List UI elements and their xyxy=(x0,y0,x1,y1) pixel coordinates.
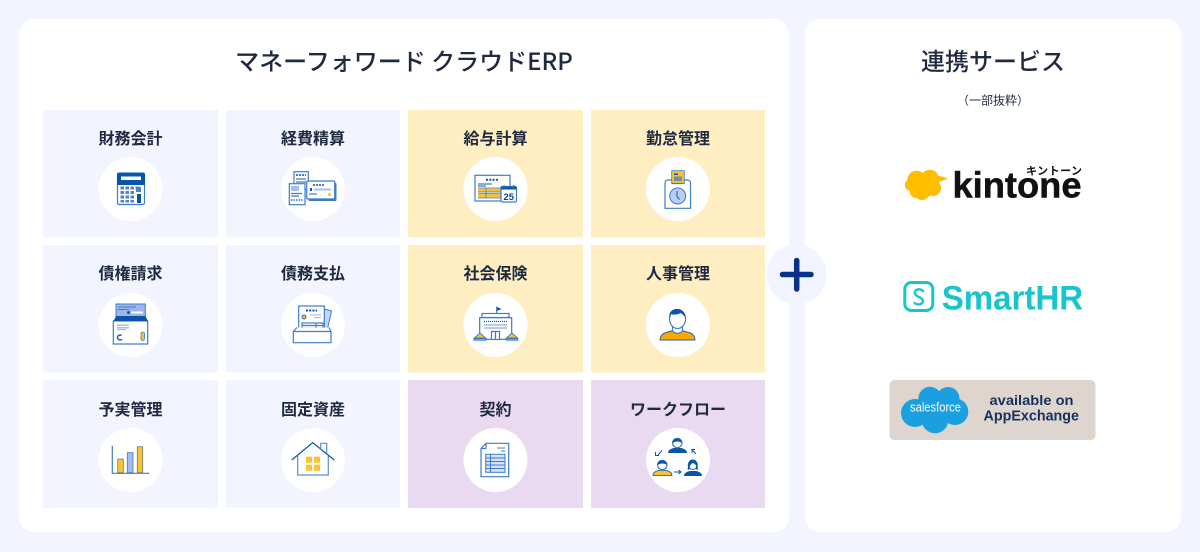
heading: 連携サービス: 連携サービス xyxy=(921,49,1065,76)
icon: document tray xyxy=(293,306,332,343)
icon: plus connector xyxy=(767,244,827,304)
icon: calculator xyxy=(117,173,145,204)
panel: 連携サービス xyxy=(805,19,1181,532)
note: 一部抜粋: （一部抜粋） xyxy=(957,94,1029,108)
tile: 経費精算 xyxy=(226,110,400,238)
logo: kintone: kintone xyxy=(952,165,1082,206)
icon: invoice envelope xyxy=(113,304,148,344)
tile: 債務支払: 債務支払 xyxy=(281,264,345,283)
tile: 勤怠管理: 勤怠管理 xyxy=(646,129,710,148)
tile: ワークフロー: ワークフロー xyxy=(630,401,726,419)
badge: salesforce AppExchange: salesforce xyxy=(910,401,961,415)
tile: 契約: 契約 xyxy=(479,400,512,419)
tile: 給与計算: 給与計算 xyxy=(463,129,528,148)
tile: 財務会計: 財務会計 xyxy=(98,129,163,148)
icon: office building xyxy=(474,306,518,340)
icon: contract document xyxy=(481,443,509,477)
tile: ワークフロー xyxy=(591,380,765,508)
tile: 債権請求: 債権請求 xyxy=(98,264,163,283)
tile: 固定資産: 固定資産 xyxy=(281,400,345,419)
icon: house xyxy=(292,443,334,475)
tile: 給与計算 xyxy=(408,110,583,238)
tile: 社会保険: 社会保険 xyxy=(463,265,528,283)
heading: main title: マネーフォワード クラウドERP xyxy=(235,42,573,77)
tile: 債権請求 xyxy=(43,245,218,372)
tile: 人事管理 xyxy=(591,245,765,372)
tile: 債務支払 xyxy=(226,245,400,372)
tile: 固定資産 xyxy=(226,380,400,508)
tile: 人事管理: 人事管理 xyxy=(646,264,710,283)
badge: salesforce AppExchange xyxy=(890,380,1096,440)
icon: payslip and calendar: 25 xyxy=(504,192,515,203)
icon: payslip and calendar xyxy=(475,175,516,203)
badge: salesforce AppExchange: available on xyxy=(990,392,1074,408)
tile: 経費精算: 経費精算 xyxy=(281,129,345,148)
tile: 社会保険 xyxy=(408,245,583,372)
badge: salesforce AppExchange: AppExchange xyxy=(984,408,1079,424)
logo: SmartHR: SmartHR xyxy=(942,279,1083,317)
tile: 財務会計 xyxy=(43,110,218,238)
icon: person xyxy=(660,309,695,340)
icon: receipts and card xyxy=(289,172,336,205)
logo: kintone: キントーン xyxy=(1026,166,1082,178)
panel: マネーフォワード クラウドERP xyxy=(19,19,789,532)
icon: time clock xyxy=(665,171,690,208)
tile: 契約 xyxy=(408,380,583,508)
icon: workflow people xyxy=(653,438,702,476)
tile: 予実管理 xyxy=(43,380,218,508)
tile: 予実管理: 予実管理 xyxy=(98,400,163,419)
icon: bar chart xyxy=(112,446,149,473)
tile: 勤怠管理 xyxy=(591,110,765,238)
